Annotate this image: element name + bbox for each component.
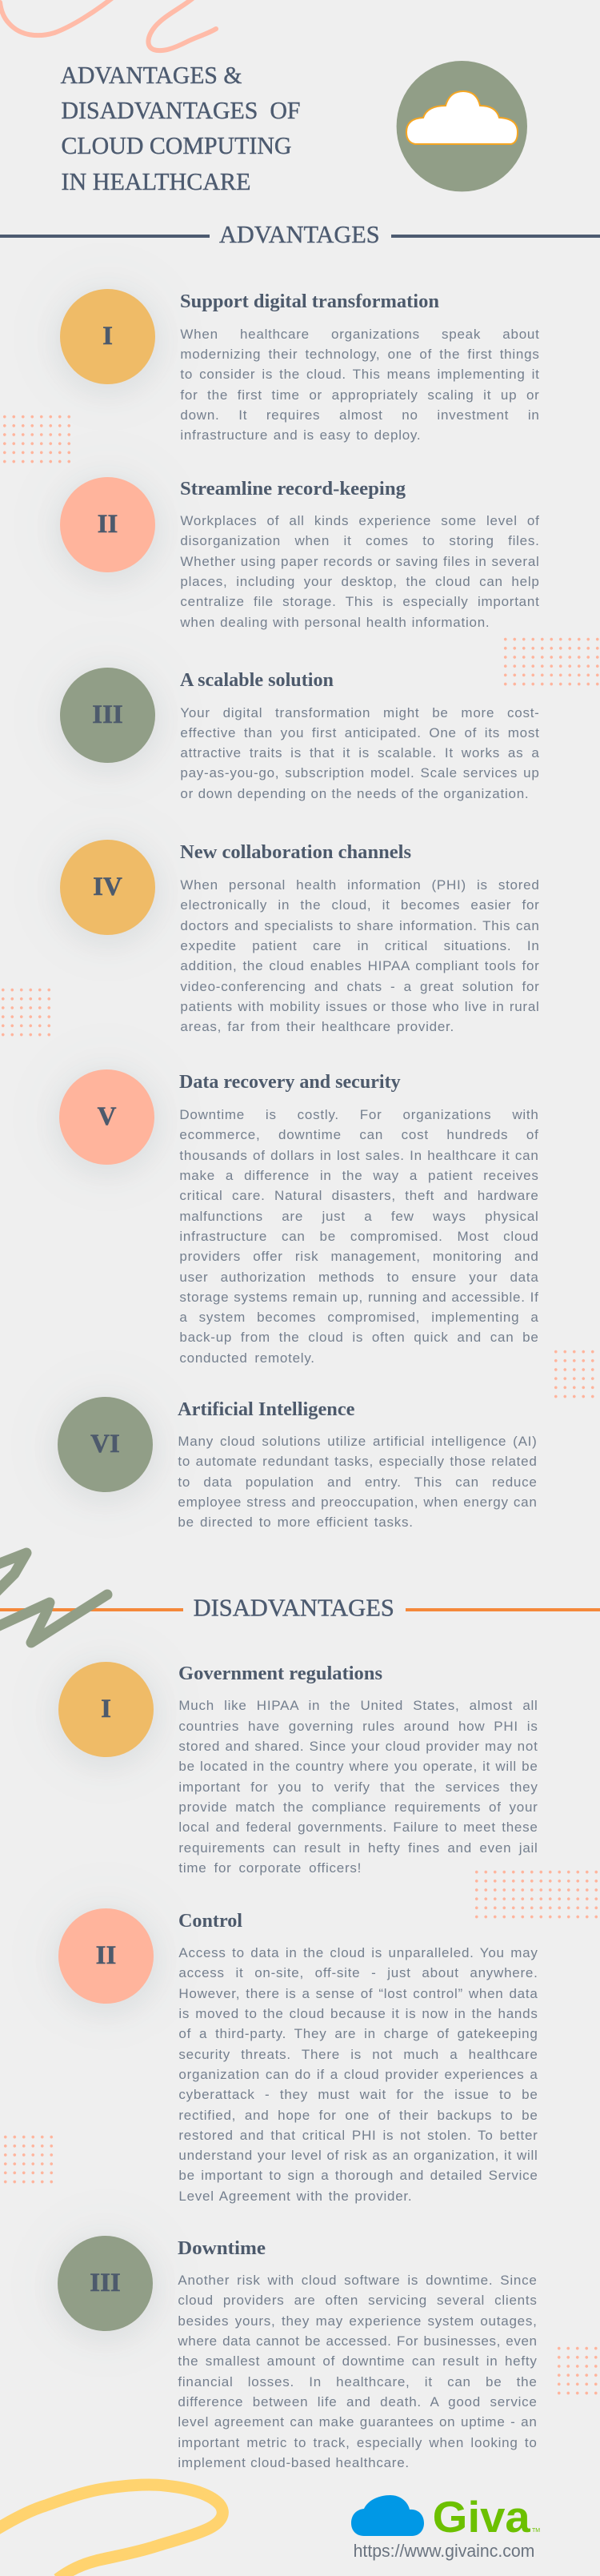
- body text: be directed to more efficient tasks.: [178, 1515, 414, 1530]
- panel: control: [51, 1907, 538, 2204]
- body text: down. It requires almost no investment in: [180, 407, 540, 423]
- body text: Access to data in the cloud is unparalleled. You may: [178, 1945, 538, 1960]
- badge: V: V: [98, 1102, 116, 1131]
- body text: make a difference in the way a patient receives: [179, 1168, 539, 1183]
- body text: patients with mobility issues or those who live in rural: [180, 999, 540, 1014]
- body text: user authorization methods to ensure your data: [179, 1270, 539, 1285]
- body text: malfunctions are just a few ways physical: [179, 1209, 539, 1224]
- section header: advantages: ADVANTAGES: [219, 220, 380, 248]
- heading: Control: [178, 1911, 243, 1932]
- body text: the smallest amount of downtime can result in hefty: [178, 2353, 538, 2369]
- section header: advantages: [0, 220, 600, 248]
- panel: downtime: [51, 2233, 538, 2470]
- body text: disorganization when it comes to storing files.: [180, 533, 540, 548]
- badge: I: I: [102, 322, 113, 351]
- body text: Much like HIPAA in the United States, almost all: [178, 1698, 538, 1713]
- body text: [178, 1434, 538, 1530]
- body text: access it on-site, off-site - just about anywhere.: [178, 1965, 538, 1980]
- body text: understand your level of risk as an organization, it will: [178, 2148, 538, 2163]
- body text: [180, 877, 540, 1034]
- body text: Another risk with cloud software is downtime. Since: [178, 2273, 538, 2288]
- body text: ecommerce, downtime can cost hundreds of: [179, 1127, 539, 1142]
- body text: financial losses. In healthcare, it can be the: [178, 2374, 538, 2389]
- body text: requirements can result in hefty fines and even jail: [178, 1840, 538, 1856]
- body text: [180, 704, 540, 801]
- body text: a system becomes compromised, implementing a: [179, 1310, 539, 1325]
- panel: data recovery and security: [53, 1068, 539, 1366]
- heading: Downtime: [178, 2238, 266, 2259]
- decoration: yellow scribble: [0, 2478, 229, 2576]
- body text: to consider is the cloud. This means implementing it: [180, 367, 540, 382]
- decoration: peach scribble: [0, 0, 218, 53]
- heading: Data recovery and security: [179, 1072, 401, 1093]
- body text: to data population and entry. This can reduce: [178, 1475, 538, 1490]
- body text: areas, far from their healthcare provider.: [180, 1019, 454, 1034]
- icon: cloud in circle: [397, 61, 527, 192]
- title: DISADVANTAGES OF: [61, 96, 301, 124]
- body text: Whether using paper records or saving files in several: [180, 554, 540, 569]
- title: [61, 61, 301, 195]
- body text: back-up from the cloud is often quick and can be: [179, 1330, 539, 1345]
- title: ADVANTAGES &: [61, 61, 242, 89]
- body text: or down depending on the needs of the organization.: [180, 786, 529, 801]
- badge: IV: [60, 840, 155, 935]
- body text: [178, 1698, 538, 1876]
- badge: VI: VI: [90, 1430, 120, 1459]
- body text: stored and shared. Since your cloud provider may not: [178, 1739, 538, 1754]
- badge: I: [60, 289, 155, 384]
- panel: streamline record-keeping: [53, 475, 540, 630]
- body text: restored and that critical PHI is not stolen. To better: [178, 2128, 538, 2143]
- badge: II: II: [96, 1941, 116, 1970]
- body text: [178, 2273, 538, 2470]
- body text: be located in the country where you operate, it will be: [178, 1759, 538, 1774]
- heading: New collaboration channels: [180, 842, 411, 863]
- body text: electronically in the cloud, it becomes easier for: [180, 897, 540, 913]
- body text: implement cloud-based healthcare.: [178, 2455, 410, 2470]
- badge: VI: [58, 1397, 153, 1492]
- wordmark: Giva: [433, 2492, 530, 2542]
- body text: security threats. There is not much a healthcare: [178, 2047, 538, 2062]
- badge: IV: IV: [93, 873, 122, 901]
- panel: government regulations: [51, 1660, 538, 1876]
- body text: important metric to track, especially when looking to: [178, 2435, 538, 2450]
- body text: [180, 513, 540, 630]
- body text: modernizing their technology, one of the first things: [180, 347, 540, 362]
- body text: thousands of dollars in lost sales. In healthcare it can: [179, 1148, 539, 1163]
- body text: effective than you first anticipated. One of its most: [180, 725, 540, 740]
- body text: time for corporate officers!: [178, 1860, 362, 1876]
- body text: when dealing with personal health information.: [180, 615, 490, 630]
- body text: provide match the compliance requirements of your: [178, 1800, 538, 1815]
- body text: besides yours, they may experience system outages,: [178, 2313, 538, 2329]
- badge: II: [60, 477, 155, 572]
- badge: I: [58, 1662, 154, 1757]
- wordmark: TM: [532, 2528, 540, 2534]
- body text: providers offer risk management, monitoring and: [179, 1249, 539, 1264]
- body text: conducted remotely.: [179, 1350, 315, 1366]
- body text: attractive traits is that it is scalable. It works as a: [180, 745, 540, 760]
- body text: of a third-party. They are in charge of gatekeeping: [178, 2026, 538, 2041]
- body text: level agreement can make guarantees on uptime - an: [178, 2414, 538, 2430]
- badge: III: III: [90, 2269, 121, 2297]
- body text: is moved to the cloud because it is now in the hands: [178, 2006, 538, 2021]
- body text: When healthcare organizations speak about: [180, 327, 540, 342]
- body text: important for you to verify that the services they: [178, 1780, 538, 1795]
- section header: disadvantages: DISADVANTAGES: [194, 1594, 394, 1622]
- body text: where data cannot be accessed. For businesses, even: [178, 2333, 538, 2349]
- badge: V: [59, 1069, 154, 1165]
- body text: to automate redundant tasks, especially those related: [178, 1454, 538, 1469]
- body text: addition, the cloud enables HIPAA compliant tools for: [180, 958, 540, 973]
- body text: infrastructure and is easy to deploy.: [180, 427, 421, 443]
- body text: local and federal governments. Failure to meet these: [178, 1820, 538, 1835]
- body text: Level Agreement with the provider.: [178, 2189, 412, 2204]
- body text: places, including your desktop, the cloud can help: [180, 574, 540, 589]
- badge: III: [58, 2236, 153, 2331]
- body text: employee stress and preoccupation, when energy can: [178, 1495, 538, 1510]
- heading: Support digital transformation: [180, 291, 439, 312]
- badge: III: III: [92, 700, 123, 729]
- body text: for the first time or appropriately scaling it up or: [180, 387, 540, 403]
- body text: [180, 327, 540, 443]
- heading: Government regulations: [178, 1663, 382, 1684]
- heading: Streamline record-keeping: [180, 479, 406, 500]
- panel: support digital transformation: [53, 287, 540, 443]
- body text: storage systems remain up, running and accessible. If: [179, 1290, 539, 1305]
- body text: cloud providers are often servicing several clients: [178, 2293, 538, 2308]
- body text: cyberattack - they must wait for the issue to be: [178, 2087, 538, 2102]
- body text: However, there is a sense of “lost control” when data: [178, 1986, 538, 2001]
- url: https://www.givainc.com: [354, 2541, 534, 2561]
- body text: expedite patient care in critical situations. In: [180, 938, 540, 953]
- badge: I: I: [101, 1695, 111, 1723]
- body text: doctors and specialists to share information. This can: [180, 918, 540, 933]
- body text: organization can do if a cloud provider experiences a: [178, 2067, 538, 2082]
- body text: Many cloud solutions utilize artificial intelligence (AI): [178, 1434, 538, 1449]
- panel: artificial intelligence: [51, 1394, 538, 1530]
- body text: critical care. Natural disasters, theft and hardware: [179, 1188, 539, 1203]
- title: IN HEALTHCARE: [61, 167, 251, 195]
- panel: a scalable solution: [53, 666, 540, 801]
- body text: be important to sign a thorough and detailed Service: [178, 2168, 538, 2183]
- body text: When personal health information (PHI) is stored: [180, 877, 540, 893]
- badge: III: [60, 668, 155, 763]
- icon: blue cloud: [351, 2495, 424, 2536]
- body text: difference between life and death. A good service: [178, 2394, 538, 2409]
- badge: II: II: [98, 509, 118, 538]
- body text: centralize file storage. This is especially important: [180, 594, 540, 609]
- decoration: green scribble: [0, 1548, 112, 1647]
- body text: countries have governing rules around how PHI is: [178, 1719, 538, 1734]
- body text: pay-as-you-go, subscription model. Scale services up: [180, 765, 540, 780]
- logo: Giva: [351, 2492, 540, 2561]
- heading: Artificial Intelligence: [178, 1399, 355, 1420]
- body text: video-conferencing and chats - a great solution for: [180, 979, 540, 994]
- body text: rectified, and hope for one of their backups to be: [178, 2108, 538, 2123]
- body text: [179, 1107, 539, 1366]
- body text: infrastructure can be compromised. Most cloud: [179, 1229, 539, 1244]
- body text: Your digital transformation might be more cost-: [180, 704, 540, 720]
- title: CLOUD COMPUTING: [61, 131, 291, 159]
- heading: A scalable solution: [180, 670, 334, 691]
- badge: II: [58, 1908, 154, 2004]
- body text: Downtime is costly. For organizations with: [179, 1107, 539, 1122]
- body text: [178, 1945, 538, 2204]
- body text: Workplaces of all kinds experience some level of: [180, 513, 540, 528]
- panel: new collaboration channels: [53, 837, 540, 1034]
- section header: disadvantages: [0, 1594, 600, 1622]
